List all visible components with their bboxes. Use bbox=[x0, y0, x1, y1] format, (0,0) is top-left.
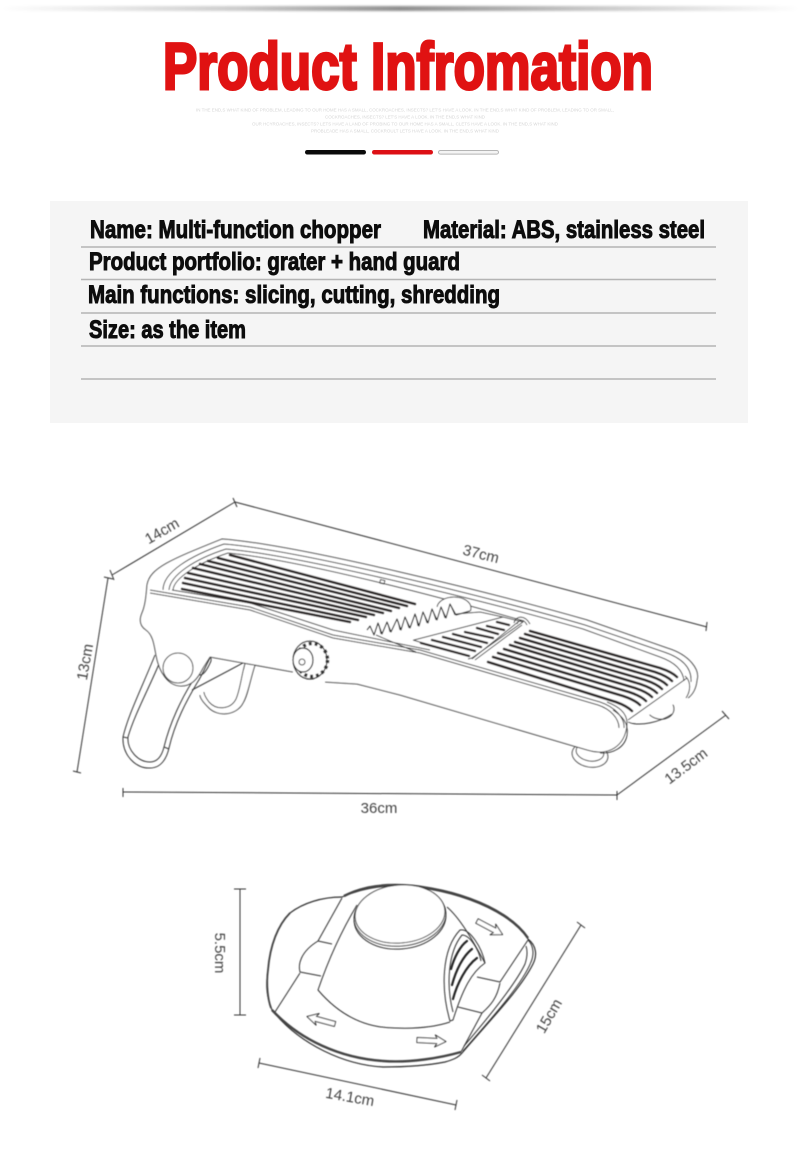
spec: size: Size: as the item bbox=[89, 316, 246, 344]
subtitle small text: COCKROACHES, INSECTS? LET'S HAVE A LOOK. IN THE END,S WHAT KIND bbox=[325, 114, 486, 120]
dimension: 36cm bbox=[123, 788, 617, 817]
spec: name: Name: Multi-function chopper bbox=[90, 216, 381, 244]
hand guard left clip bbox=[275, 898, 342, 1012]
spec: material: Material: ABS, stainless steel bbox=[423, 216, 705, 244]
hand guard arrow left bbox=[305, 1011, 337, 1030]
dimension: 37cm bbox=[235, 502, 707, 631]
dimension: 13.5cm: 13.5cm bbox=[662, 745, 711, 788]
hand guard hatched rim bbox=[344, 885, 528, 938]
dimension: 14cm bbox=[110, 498, 237, 580]
dimension: 13cm: 13cm bbox=[74, 643, 97, 682]
hand guard outer shell bbox=[267, 886, 536, 1067]
chopper handle bbox=[123, 655, 210, 768]
decorative colour bars bbox=[305, 150, 498, 154]
subtitle small text: PROBLEADE HAS A SMALL, COCKROULT LETS HAVE A LOOK. IN THE END,S WHAT KIND bbox=[311, 128, 500, 134]
title: Product Infromation bbox=[163, 29, 653, 103]
subtitle small text: OUR HCYROACHES, INSECTS? LETS HAVE A LAND OF PROBING TO OUR HOME HAS A SMALL, CLETS HAVE A LOOK. IN THE END,S WHAT KIND bbox=[252, 122, 559, 126]
top shadow band bbox=[0, 6, 800, 11]
hand guard vent bbox=[444, 930, 485, 1021]
dimension: 14cm: 14cm bbox=[142, 515, 182, 548]
chopper body outline bbox=[147, 539, 698, 698]
dimension: 36cm: 36cm bbox=[361, 800, 397, 817]
chopper grating bars left bbox=[182, 555, 415, 622]
subtitle small text bbox=[196, 108, 614, 134]
chopper line drawing bbox=[123, 539, 698, 770]
dimension: 15cm bbox=[482, 922, 585, 1081]
chopper handle hole bbox=[163, 653, 193, 683]
dimension: 14.1cm bbox=[258, 1058, 457, 1110]
chopper grating bars right bbox=[488, 631, 677, 711]
chopper top rim lines bbox=[150, 590, 624, 728]
chopper rear feet bbox=[570, 695, 676, 770]
spec: product portfolio: Product portfolio: grater + hand guard bbox=[89, 248, 460, 276]
chopper blade window bbox=[437, 597, 471, 619]
subtitle small text: IN THE END,S WHAT KIND OF PROBLEM, LEADING TO OUR HOME HAS A SMALL, COCKROACHES, INSECTS? LET'S HAVE A LOOK. IN THE END,S WHAT KIND OF PROBLEM, LEADING TO OR SMALL, bbox=[196, 108, 614, 112]
dimension: 13cm bbox=[73, 577, 113, 773]
dimension: 5.5cm bbox=[211, 889, 246, 1015]
chopper teeth bbox=[367, 604, 470, 635]
dimension: 37cm: 37cm bbox=[461, 542, 501, 567]
diagram: hand guard with dimensions bbox=[211, 881, 585, 1110]
chopper body fill bbox=[140, 539, 698, 752]
panel: product specifications bbox=[50, 201, 748, 423]
chopper dial knob bbox=[293, 641, 328, 679]
dimension: 13.5cm bbox=[617, 711, 729, 795]
hand guard dome body bbox=[318, 905, 485, 1028]
hand guard arrow right bbox=[417, 1034, 446, 1048]
chopper rear leg loop bbox=[200, 663, 255, 714]
spec: main functions: Main functions: slicing, cutting, shredding bbox=[88, 281, 500, 309]
chopper body end cap bbox=[600, 710, 627, 753]
dimension: 14.1cm: 14.1cm bbox=[324, 1085, 376, 1110]
diagram: chopper with dimensions bbox=[73, 498, 729, 817]
hand guard right clip bbox=[458, 940, 528, 1052]
chopper grating bars middle bbox=[421, 622, 509, 656]
hand guard arrow upper right bbox=[474, 916, 505, 940]
hand guard line drawing bbox=[267, 881, 536, 1067]
hand guard top knob bbox=[351, 881, 449, 953]
dimension: 5.5cm: 5.5cm bbox=[211, 933, 228, 973]
dimension: 15cm: 15cm bbox=[533, 996, 566, 1036]
